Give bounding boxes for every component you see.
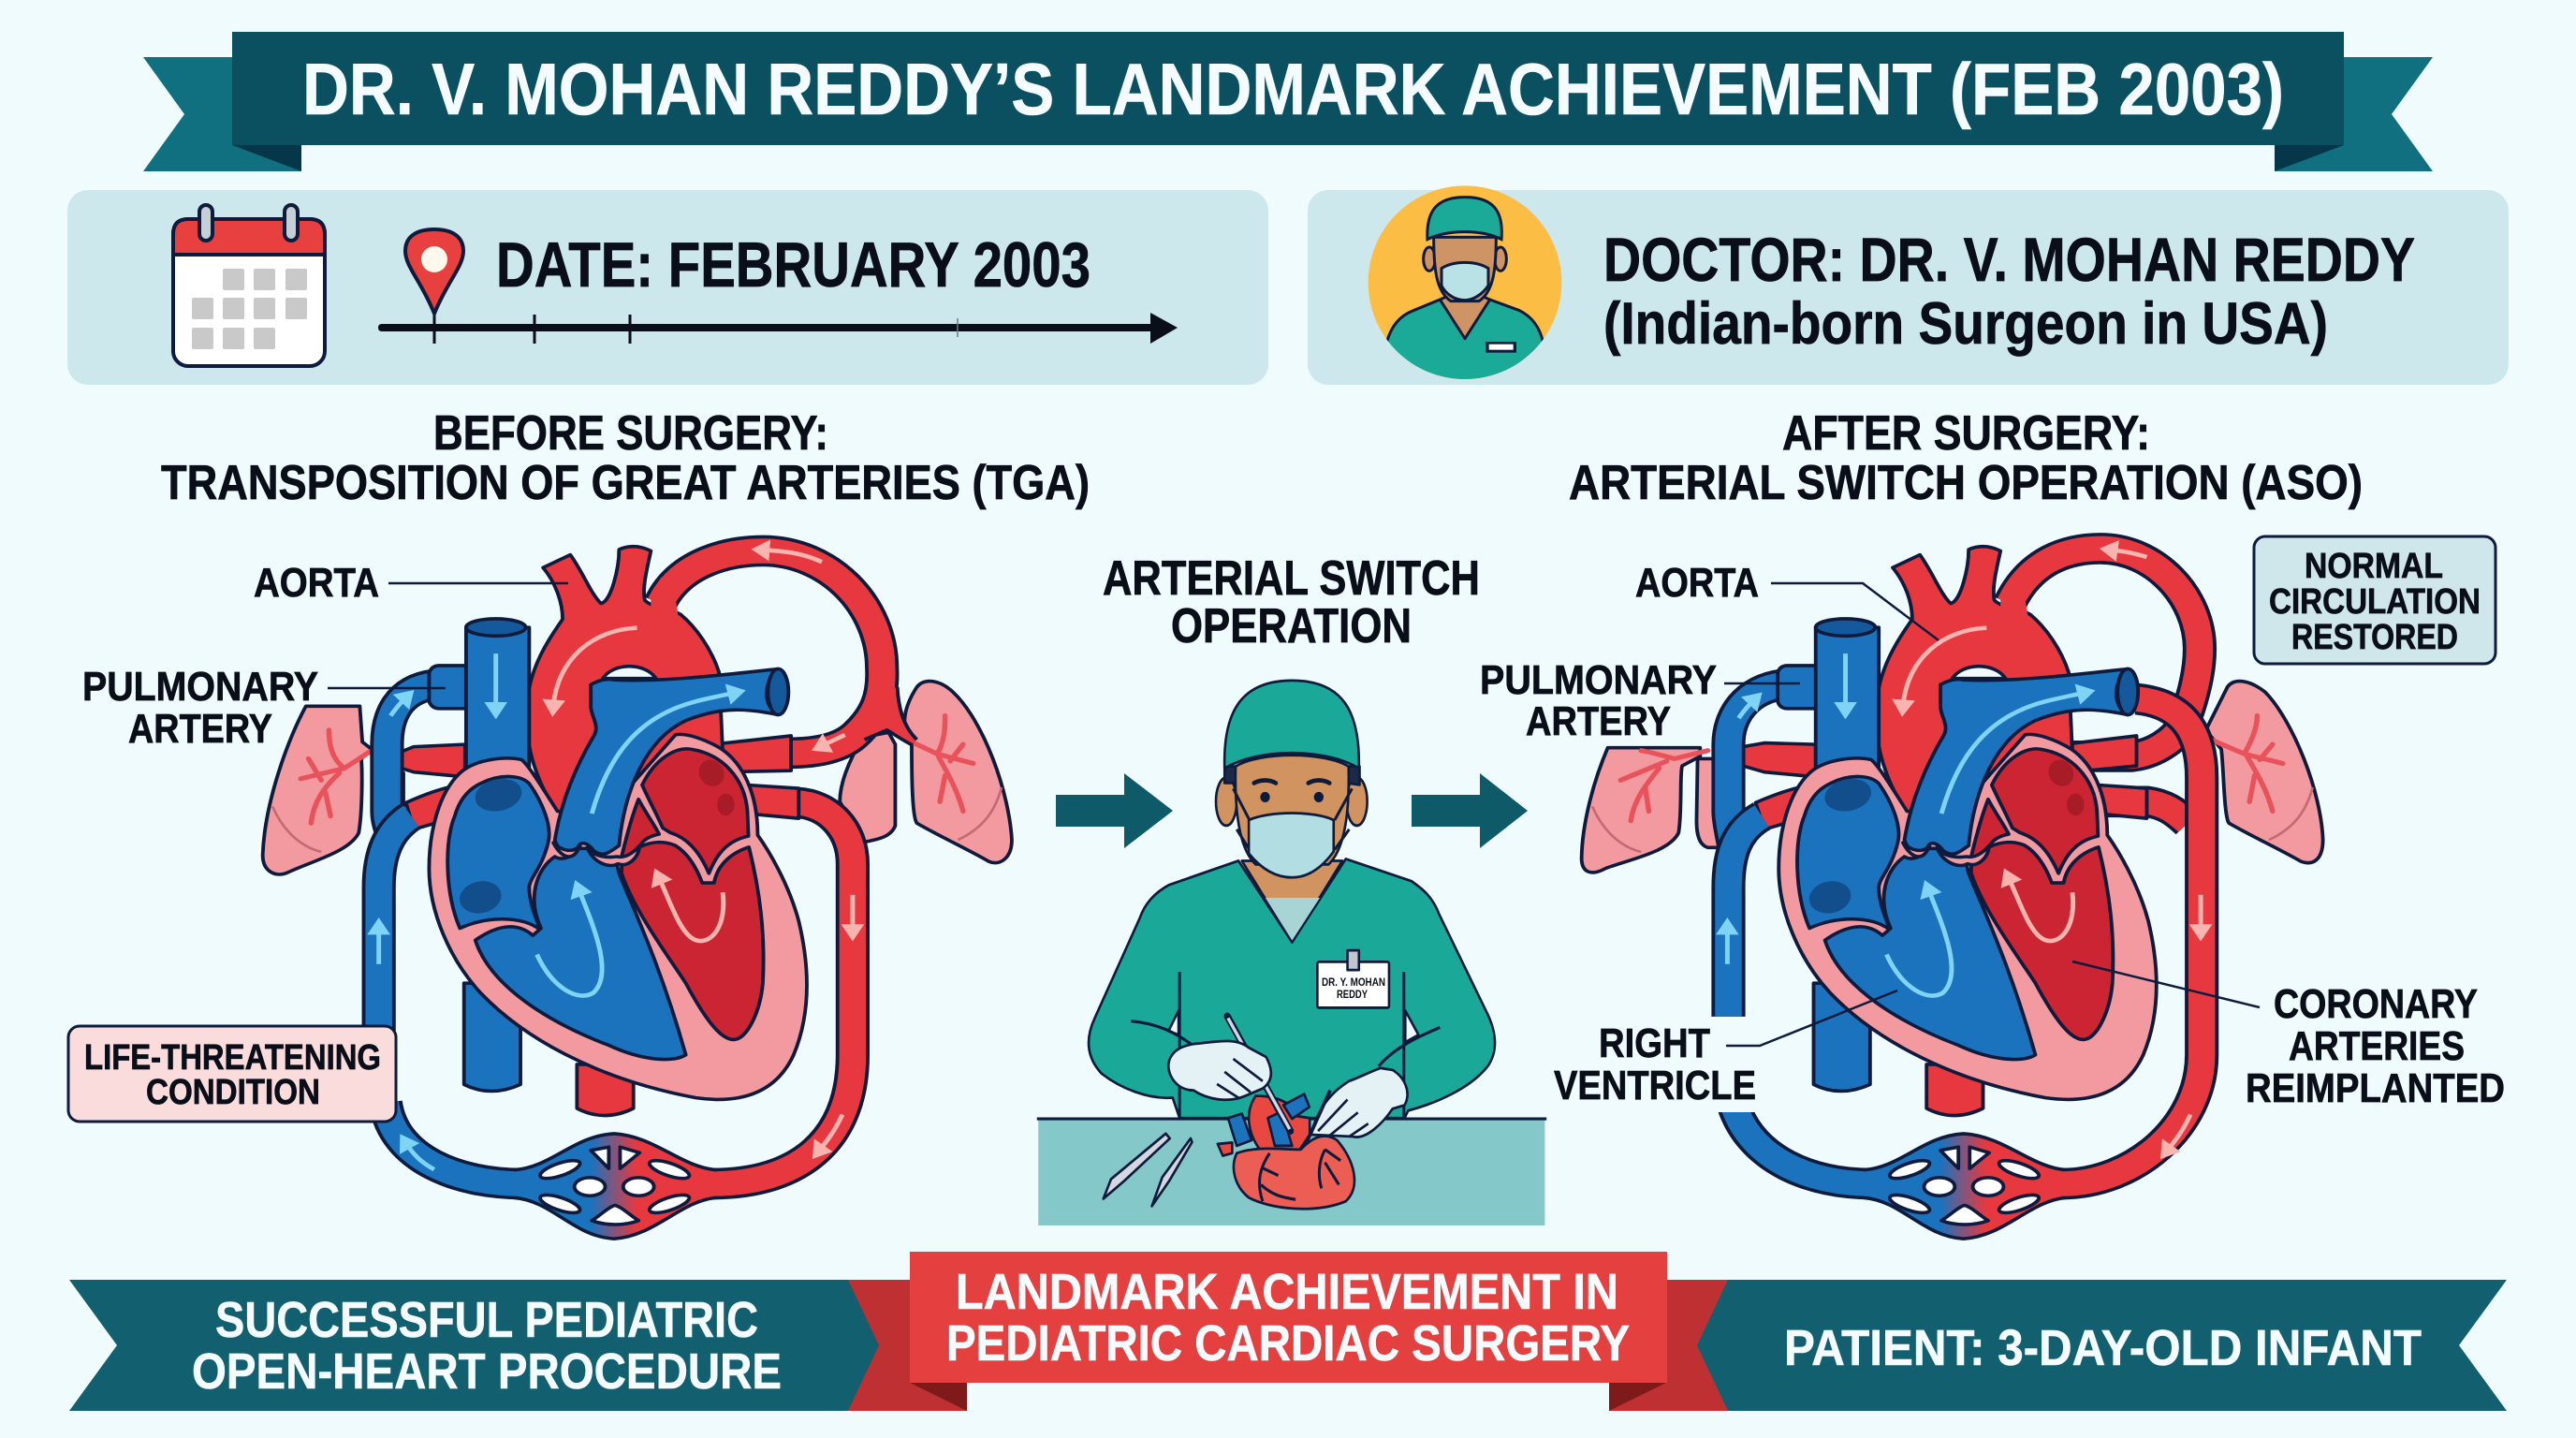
callout: life-threatening condition: CONDITION [146, 1073, 320, 1112]
doctor text [1603, 225, 2415, 357]
label: right ventricle: VENTRICLE [1554, 1063, 1756, 1108]
callout: normal circulation restored: RESTORED [2291, 618, 2458, 657]
heading: before surgery [161, 406, 1090, 510]
label: aorta (after): AORTA [1635, 560, 1759, 606]
surgical tools on table [1104, 1134, 1192, 1206]
heading: after surgery [1569, 406, 2363, 510]
label: pulmonary artery (after): PULMONARY [1480, 657, 1717, 703]
icon: calendar [173, 205, 325, 366]
scalpel [1227, 1017, 1291, 1131]
reimplanted great artery [1727, 550, 2202, 1183]
heading: after surgery: ARTERIAL SWITCH OPERATION (ASO) [1569, 456, 2363, 510]
heading: before surgery: BEFORE SURGERY: [433, 406, 828, 461]
badge text: REDDY [1337, 988, 1368, 1001]
left lung [263, 706, 403, 874]
bottom ribbon: patient: PATIENT: 3-DAY-OLD INFANT [1784, 1320, 2422, 1376]
label: pulmonary artery (after): ARTERY [1526, 698, 1671, 744]
label: coronary arteries reimplanted: CORONARY [2274, 981, 2478, 1027]
right glove [1306, 1068, 1408, 1144]
right lung [840, 682, 1012, 863]
label: pulmonary artery (after) [1480, 657, 1800, 744]
heading: arterial switch operation: OPERATION [1171, 599, 1412, 653]
heading: after surgery: AFTER SURGERY: [1782, 406, 2150, 461]
torso in scrubs [1089, 858, 1495, 1118]
heart [1778, 547, 2157, 1239]
left lung [1582, 748, 1723, 873]
title text: DR. V. MOHAN REDDY’S LANDMARK ACHIEVEMENT (FEB 2003) [302, 48, 2284, 130]
bottom ribbon: procedure: SUCCESSFUL PEDIATRIC [215, 1292, 758, 1348]
callout: normal circulation restored: CIRCULATION [2269, 582, 2481, 622]
heart [429, 547, 807, 1239]
heart diagram: before surgery [260, 536, 1014, 1240]
date text: DATE: FEBRUARY 2003 [496, 229, 1090, 301]
heart diagram: after surgery [1580, 533, 2325, 1240]
head [1216, 681, 1368, 877]
label: coronary arteries reimplanted: REIMPLANTED [2246, 1065, 2505, 1111]
heading: arterial switch operation [1103, 551, 1480, 653]
left glove [1168, 1041, 1271, 1100]
callout: normal circulation restored: NORMAL [2305, 547, 2443, 586]
name badge [1317, 950, 1389, 1007]
callout: life-threatening condition: LIFE-THREATENING [84, 1038, 381, 1078]
arrow: before to operation [1056, 773, 1173, 848]
label: coronary arteries reimplanted [2072, 961, 2505, 1111]
arrow: operation to after [1412, 773, 1528, 848]
bottom ribbon: patient [1609, 1280, 2507, 1411]
label: pulmonary artery (before) [75, 664, 446, 752]
label: pulmonary artery (before): PULMONARY [82, 664, 318, 710]
badge text [1322, 976, 1385, 1001]
bottom ribbon: procedure: OPEN-HEART PROCEDURE [192, 1343, 782, 1400]
vessels [1728, 549, 2313, 1183]
icon: doctor portrait [1368, 185, 1561, 379]
bottom ribbon: landmark achievement [910, 1252, 1667, 1383]
panel: doctor [1308, 185, 2509, 396]
badge text: DR. Y. MOHAN [1322, 976, 1385, 989]
heading: arterial switch operation: ARTERIAL SWITCH [1103, 551, 1480, 606]
bottom ribbon: landmark achievement: LANDMARK ACHIEVEMENT IN [956, 1264, 1618, 1320]
label: right ventricle: RIGHT [1599, 1020, 1710, 1066]
operating table [1037, 1119, 1546, 1225]
doctor text: DOCTOR: DR. V. MOHAN REDDY [1603, 225, 2415, 294]
panel: date [67, 190, 1268, 385]
label: coronary arteries reimplanted: ARTERIES [2289, 1023, 2465, 1069]
right lung [2206, 682, 2323, 863]
vessels [379, 550, 916, 1183]
label: right ventricle [1554, 990, 1897, 1112]
scalpel highlight [1228, 1019, 1290, 1129]
title banner [143, 32, 2433, 171]
small heart [1218, 1094, 1354, 1209]
timeline arrow [378, 309, 1178, 344]
heading: before surgery: TRANSPOSITION OF GREAT ARTERIES (TGA) [161, 456, 1090, 510]
bottom ribbon: landmark achievement: PEDIATRIC CARDIAC SURGERY [946, 1315, 1630, 1372]
label: aorta (after) [1635, 560, 1939, 640]
doctor text: (Indian-born Surgeon in USA) [1603, 291, 2328, 357]
bottom ribbon: procedure [69, 1280, 967, 1411]
callout: normal circulation restored [2254, 536, 2496, 664]
callout: life-threatening condition [68, 1026, 396, 1122]
label: pulmonary artery (before): ARTERY [128, 706, 272, 752]
surgeon illustration [1037, 680, 1546, 1225]
icon: location pin [405, 229, 463, 314]
label: aorta (before): AORTA [254, 560, 379, 606]
